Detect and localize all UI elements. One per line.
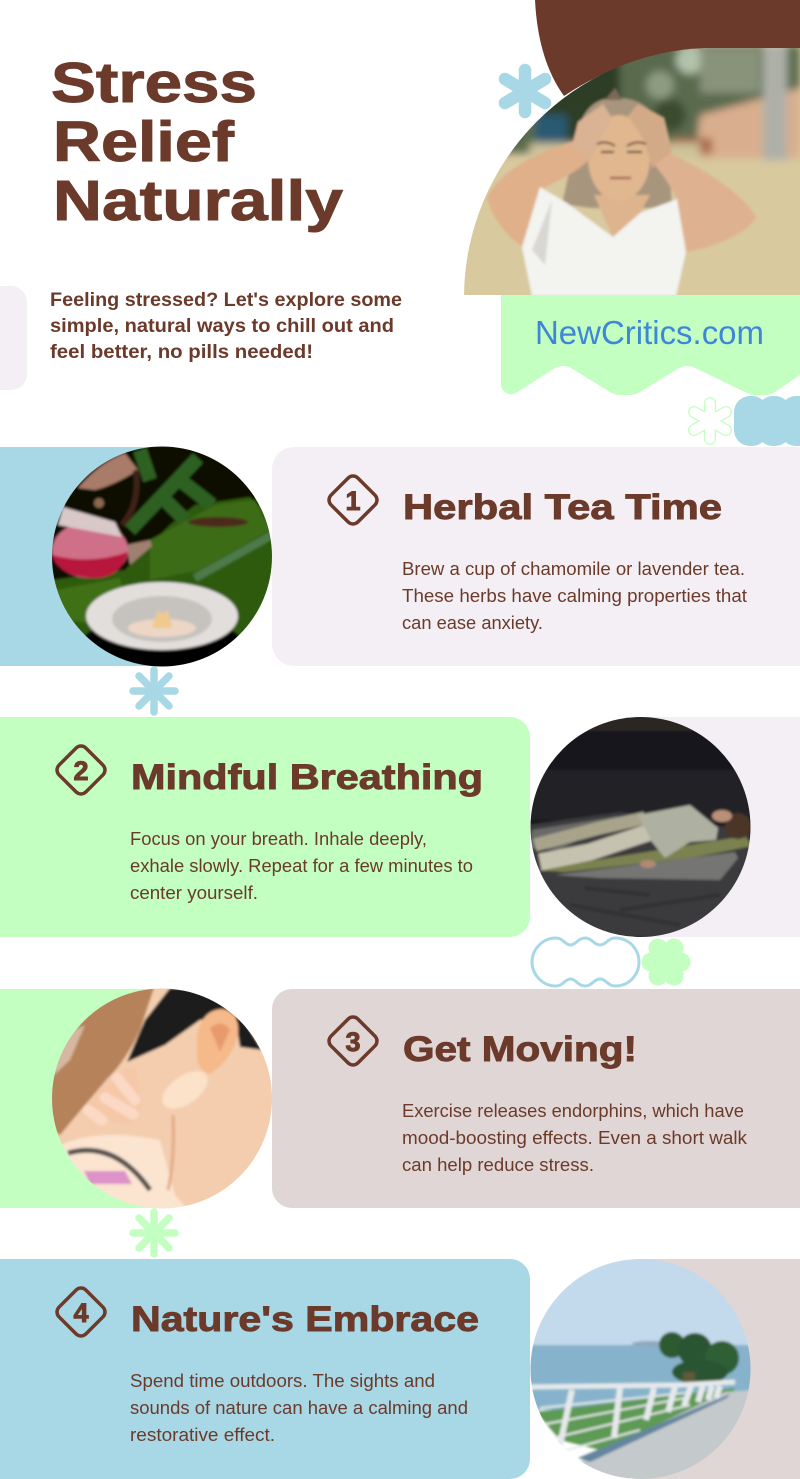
panel: herbal tea <box>0 445 800 670</box>
heading: Get Moving! <box>403 1030 637 1069</box>
photo: teapot <box>50 445 275 670</box>
title: Stress <box>51 51 257 115</box>
icon: blue scalloped blob <box>734 396 800 446</box>
title: Naturally <box>53 169 343 233</box>
intro text: feel better, no pills needed! <box>50 341 313 363</box>
panel: get moving <box>0 985 800 1212</box>
icon: number 2 <box>54 743 108 797</box>
icon: number 3: 3 <box>345 1027 361 1057</box>
panel: website banner <box>501 295 800 395</box>
photo: seaside walkway <box>528 1257 755 1479</box>
icon: number 1: 1 <box>345 486 361 516</box>
brown corner shape <box>535 0 800 96</box>
photo: person lying down <box>528 715 753 940</box>
icon: blue asterisk top <box>505 70 545 112</box>
body text: center yourself. <box>130 883 258 903</box>
panel: mindful breathing <box>0 715 800 940</box>
body text: Spend time outdoors. The sights and <box>130 1371 435 1391</box>
icon: blue asterisk <box>133 670 175 712</box>
body text: sounds of nature can have a calming and <box>130 1398 468 1418</box>
taupe backing <box>640 1259 800 1479</box>
photo: stressed woman <box>460 45 800 300</box>
heading: Herbal Tea Time <box>403 488 722 527</box>
left accent tab <box>0 286 27 390</box>
icon: green flower <box>651 948 681 976</box>
blue backing <box>0 447 170 666</box>
card <box>0 717 530 937</box>
intro text <box>50 289 402 363</box>
intro text: Feeling stressed? Let's explore some <box>50 289 402 311</box>
body text <box>402 1101 748 1175</box>
icon: blue outline blob <box>532 938 639 986</box>
body text: can ease anxiety. <box>402 613 543 633</box>
card <box>272 989 800 1208</box>
icon: number 4: 4 <box>73 1298 89 1328</box>
body text <box>130 1371 468 1445</box>
body text: exhale slowly. Repeat for a few minutes to <box>130 856 473 876</box>
title <box>51 51 343 233</box>
icon: green outline asterisk <box>694 403 726 439</box>
heading: Nature's Embrace <box>131 1300 479 1339</box>
body text: Exercise releases endorphins, which have <box>402 1101 744 1121</box>
body text <box>130 829 473 903</box>
icon: number 4 <box>54 1285 108 1339</box>
body text: Brew a cup of chamomile or lavender tea. <box>402 559 745 579</box>
body text: mood-boosting effects. Even a short walk <box>402 1128 748 1148</box>
intro text: simple, natural ways to chill out and <box>50 315 394 337</box>
body text: Focus on your breath. Inhale deeply, <box>130 829 427 849</box>
banner shape <box>501 295 800 395</box>
card <box>272 447 800 666</box>
icon: green asterisk <box>133 1212 175 1254</box>
body text: restorative effect. <box>130 1425 275 1445</box>
body text: These herbs have calming properties that <box>402 586 747 606</box>
icon: number 3 <box>326 1014 380 1068</box>
body text <box>402 559 747 633</box>
panel: nature's embrace <box>0 1257 800 1479</box>
body text: can help reduce stress. <box>402 1155 594 1175</box>
icon: number 2: 2 <box>73 756 89 786</box>
website name: NewCritics.com <box>535 314 764 351</box>
icon: number 1 <box>326 473 380 527</box>
green backing <box>0 989 170 1208</box>
title: Relief <box>53 110 235 174</box>
lavender backing <box>640 717 800 937</box>
heading: Mindful Breathing <box>131 758 483 797</box>
card <box>0 1259 530 1479</box>
photo: neck massage <box>50 985 275 1212</box>
